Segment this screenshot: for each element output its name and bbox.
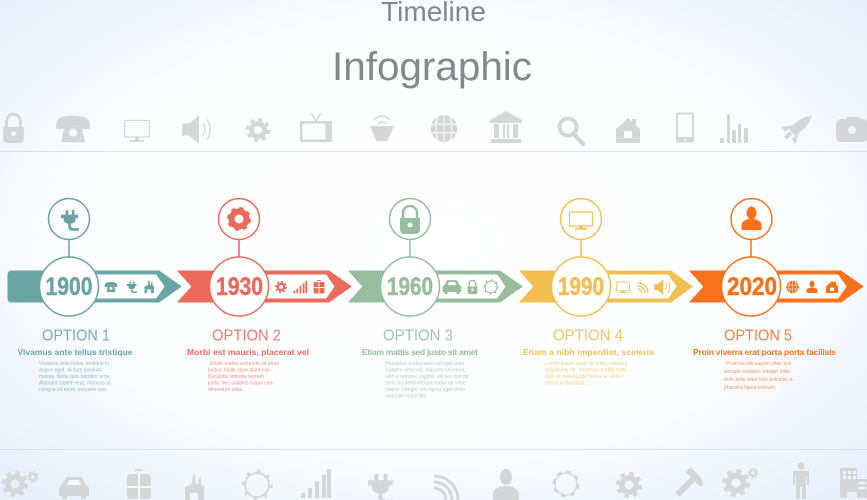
body text — [385, 361, 469, 400]
body text: Vivamus ante tellus, tristique in — [39, 361, 109, 367]
icon: lock — [468, 280, 477, 294]
year circle — [210, 257, 268, 316]
body text: Aliquam sapien erat, rhoncus ut — [39, 380, 111, 386]
body text: adipiscing elit. Vivamus et nibh nulla — [545, 368, 627, 374]
step 5: 2020 — [690, 198, 863, 391]
icon: globe — [786, 281, 799, 293]
year circle — [552, 257, 610, 316]
arrow ribbon — [349, 271, 522, 302]
year: 1960 — [387, 273, 433, 301]
icon: hammer — [670, 467, 706, 500]
year circle — [722, 257, 780, 316]
arrow ribbon — [690, 271, 863, 302]
icon: television — [300, 113, 332, 142]
icon: signal bars — [301, 469, 331, 498]
step 4: 1990 — [520, 198, 692, 386]
icon: bar chart — [720, 114, 748, 143]
year circle — [40, 257, 98, 316]
icon row: top — [3, 107, 867, 146]
subtitle: Morbi est mauris, placerat vel — [187, 347, 309, 357]
top circle with person — [731, 198, 772, 240]
icon: gears — [3, 472, 38, 496]
option heading: OPTION 4 — [553, 328, 623, 345]
year: 1900 — [46, 273, 92, 301]
icon: man — [793, 462, 809, 499]
icon: signal bars — [293, 281, 307, 293]
arrow ribbon — [8, 271, 181, 302]
icon: wifi cone — [370, 116, 394, 141]
icon: smartphone — [676, 114, 694, 142]
icon: plug — [368, 474, 394, 500]
icon: luggage — [127, 470, 151, 499]
subtitle: Proin viverra erat porta porta facilisis — [693, 347, 836, 357]
icon: globe — [431, 115, 457, 142]
title: Infographic — [332, 45, 532, 89]
body text: dum et malesuada fames ac ante i — [545, 374, 623, 380]
icon: car — [443, 280, 461, 294]
icon: factory — [185, 475, 204, 500]
icon: camera — [836, 117, 867, 142]
step 3: 1960 — [349, 198, 522, 400]
body text: molestie imperdiet. — [385, 394, 428, 400]
body text: massa. Nulla quis porttitor urna. — [39, 374, 111, 380]
option heading: OPTION 2 — [212, 328, 281, 345]
body text: justo, nec sodales turpis con- — [207, 380, 274, 386]
icon: wifi — [434, 476, 458, 500]
body text: Curabitur lobortis laoreet — [208, 374, 264, 380]
body text: pharetra ligula pretium. — [724, 385, 776, 391]
icon: gear outline — [554, 472, 578, 496]
connector — [409, 239, 411, 258]
ribbon window — [771, 275, 846, 298]
connector — [750, 239, 752, 258]
subtitle: Etiam mattis sed justo sit amet — [362, 347, 478, 357]
icon: speaker — [182, 116, 210, 144]
body text: neque. Integer non ligula eget dolor — [385, 387, 465, 393]
body text: Lorem ipsum dolor sit amet, connect — [545, 361, 628, 367]
icon: gear — [617, 473, 641, 497]
icon: gear — [276, 282, 286, 292]
ribbon window — [259, 275, 334, 298]
body text: primis in faucibus. ... — [545, 380, 591, 386]
body text: Proin iaculis sapien vitae nisl — [726, 361, 791, 367]
option heading: OPTION 3 — [383, 328, 453, 345]
icon: bank — [490, 111, 522, 143]
icon: factory — [144, 280, 154, 293]
icon: house — [826, 281, 838, 293]
icon: sun gear — [243, 471, 271, 499]
body text: semper sodales. Integer inter- — [724, 369, 792, 375]
body text — [207, 361, 280, 393]
year circle — [380, 257, 440, 316]
icon: person — [493, 469, 519, 500]
body text: sodales vehicula. Aliquam tincidunt, — [385, 368, 465, 374]
icon: gear — [248, 120, 268, 140]
year: 1930 — [216, 273, 263, 301]
icon: person — [806, 281, 818, 293]
body text: dum ante vitae felis pulvinar, a — [724, 377, 793, 383]
icon: telephone — [105, 282, 117, 292]
subtitle: Vivamus ante tellus tristique — [18, 347, 133, 357]
icon: monitor — [124, 120, 150, 142]
title — [332, 0, 532, 89]
step 2: 1930 — [178, 198, 351, 393]
icon: sun gear — [484, 280, 498, 294]
body text: nibh a tempus sagittis, elit leo blandit — [385, 374, 469, 380]
year: 1990 — [558, 273, 604, 301]
ribbon window — [89, 275, 164, 298]
icon: house — [616, 118, 640, 143]
top circle with monitor — [560, 198, 602, 240]
icon: car — [59, 477, 89, 499]
icon: telephone — [56, 116, 90, 142]
step 1: 1900 — [8, 198, 181, 393]
top circle with lock — [390, 198, 430, 240]
arrow ribbon — [520, 271, 692, 302]
icon: speaker — [654, 279, 670, 295]
icon: gears — [724, 468, 758, 495]
connector — [68, 239, 70, 258]
icon: plug — [127, 282, 137, 293]
option heading: OPTION 1 — [42, 328, 110, 345]
body text: Phasellus malesuada est eget ante — [385, 361, 464, 367]
body text: dimentum vitae. — [208, 387, 244, 393]
icon: lock — [3, 114, 24, 143]
body text: Etiam mattis sed justo sit amet — [210, 361, 280, 367]
ribbon window — [601, 275, 676, 298]
icon: building — [840, 468, 867, 498]
top circle with gear — [218, 198, 260, 240]
body text — [39, 361, 111, 393]
connector — [238, 239, 240, 258]
ribbon window — [430, 275, 505, 298]
arrow ribbon — [178, 271, 351, 302]
body text — [724, 361, 793, 391]
icon row: bottom — [3, 462, 867, 500]
icon: wifi — [638, 283, 648, 293]
connector — [580, 239, 582, 258]
option heading: OPTION 5 — [724, 328, 792, 345]
body text — [545, 361, 628, 386]
body text: congue sit amet, posuere non — [39, 387, 106, 393]
body text: augue eget, dictum pulvinar — [39, 368, 102, 374]
top circle with plug — [48, 198, 90, 240]
icon: rocket — [778, 107, 819, 146]
icon: monitor — [616, 282, 630, 293]
body text: sem, eu pellentesque tortor mi vitae — [385, 380, 466, 386]
year: 2020 — [727, 273, 777, 301]
icon: magnifier — [560, 118, 583, 144]
subtitle: Etiam a nibh imperdiet, sceleris — [523, 347, 654, 357]
icon: luggage — [314, 280, 324, 294]
body text: luctus. Nulla vitae diam nisl. — [208, 368, 271, 374]
